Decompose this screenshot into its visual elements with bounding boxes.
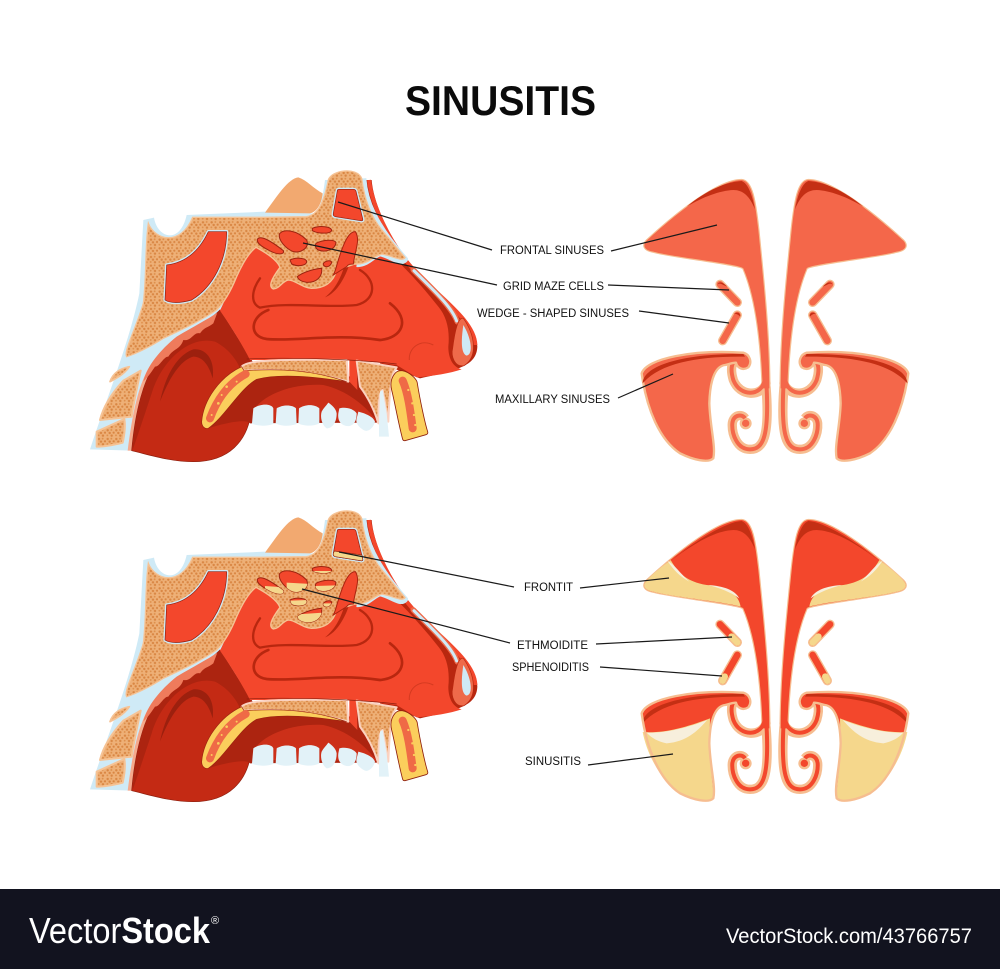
left healthy sinuses bbox=[642, 180, 769, 461]
left inflamed sinuses bbox=[642, 520, 769, 801]
frontal sinus fluid bbox=[333, 551, 363, 561]
labels: bottom: ETHMOIDITE bbox=[517, 640, 588, 652]
labels: top: GRID MAZE CELLS bbox=[503, 281, 604, 293]
labels: top: FRONTAL SINUSES bbox=[500, 245, 604, 257]
right healthy sinuses bbox=[781, 180, 908, 461]
diagram: healthy sinuses front view bbox=[642, 180, 908, 461]
ethmoid cell fluid bbox=[265, 571, 337, 623]
labels: bottom bbox=[512, 582, 589, 768]
labels: bottom: SINUSITIS bbox=[525, 756, 581, 768]
right inflamed sinuses bbox=[781, 520, 908, 801]
registered mark: ® bbox=[211, 915, 219, 927]
labels: top: MAXILLARY SINUSES bbox=[495, 394, 610, 406]
anatomy: healthy head cross-section bbox=[90, 171, 477, 462]
leader lines: bottom bbox=[302, 552, 732, 765]
labels: bottom: FRONTIT bbox=[524, 582, 573, 594]
diagram: inflamed sinuses front view bbox=[642, 520, 908, 801]
labels: bottom: SPHENOIDITIS bbox=[512, 662, 589, 674]
labels: top: WEDGE - SHAPED SINUSES bbox=[477, 308, 629, 320]
title: SINUSITIS bbox=[405, 77, 596, 124]
labels: top bbox=[477, 245, 629, 406]
leader lines: top bbox=[303, 202, 729, 398]
footer logo: VectorStock bbox=[29, 910, 211, 951]
footer id: VectorStock.com/43766757 bbox=[726, 925, 972, 948]
anatomy: inflamed head cross-section bbox=[90, 511, 477, 802]
footer bar bbox=[0, 889, 1000, 969]
